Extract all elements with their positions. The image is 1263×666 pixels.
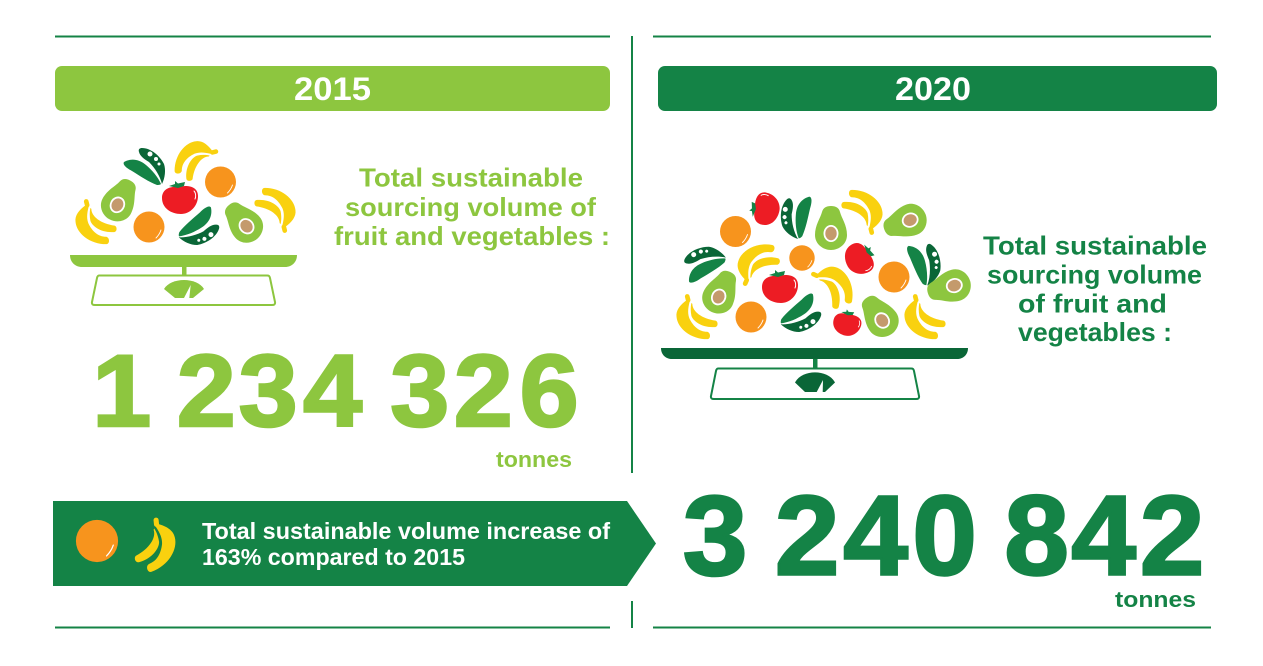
text: description 2015: [334, 162, 610, 251]
text: description 2020: Total sustainable: [983, 230, 1207, 260]
scale gauge: [164, 280, 204, 298]
orange: [878, 262, 910, 292]
orange: [789, 245, 815, 271]
icon: orange: [76, 520, 118, 562]
avocado: [815, 206, 847, 250]
unit: tonnes 2015: tonnes: [496, 447, 572, 472]
tomato: [162, 181, 198, 214]
pea pod top: [124, 148, 165, 185]
top rule left: [55, 36, 610, 38]
pea pod: [779, 287, 826, 338]
scale gauge: [795, 372, 835, 392]
text: description 2020: sourcing volume: [987, 260, 1202, 290]
banana: [676, 296, 718, 339]
banana top: [175, 141, 216, 181]
header bar 2015: [55, 66, 610, 111]
avocado right: [217, 195, 269, 249]
gauge needle: [184, 285, 191, 298]
callout text: 163% compared to 2015: [202, 544, 465, 570]
scale stem: [182, 267, 186, 275]
scale pan: [661, 348, 968, 359]
gauge needle: [817, 380, 823, 392]
header bar 2015: 2015: [294, 71, 371, 107]
icon: banana: [125, 516, 183, 576]
bottom rule left: [55, 626, 610, 628]
tomato: [762, 270, 798, 303]
text: description 2015: sourcing volume of: [345, 192, 596, 222]
callout text: [202, 518, 610, 570]
center divider upper: [631, 36, 633, 473]
icon: scale with produce 2020: [661, 186, 974, 399]
scale base: [711, 368, 919, 399]
orange upper: [205, 166, 236, 198]
banana right: [254, 188, 296, 231]
tomato: [839, 237, 881, 280]
callout text: Total sustainable volume increase of: [202, 518, 610, 544]
orange: [736, 302, 766, 332]
banana: [904, 296, 946, 339]
icon: scale with produce 2015: [70, 141, 297, 305]
callout arrow: [53, 501, 656, 586]
text: description 2015: fruit and vegetables :: [334, 221, 610, 251]
avocado: [879, 199, 931, 245]
avocado: [853, 289, 905, 343]
orange: [720, 216, 751, 247]
avocado left: [96, 173, 144, 227]
scale pan: [70, 255, 297, 267]
center divider lower: [631, 601, 633, 628]
pea pod: [770, 186, 826, 242]
text: description 2020: of fruit and: [1018, 288, 1167, 318]
text: description 2015: Total sustainable: [359, 162, 583, 192]
banana left: [75, 201, 117, 244]
scale base: [92, 276, 275, 305]
tomato: [830, 307, 864, 339]
avocado: [924, 266, 974, 308]
banana: [808, 264, 857, 311]
scale stem: [813, 359, 818, 368]
bottom rule right: [653, 626, 1211, 628]
unit: tonnes 2020: tonnes: [1115, 587, 1196, 612]
header bar 2020: 2020: [895, 71, 971, 107]
banana: [841, 190, 883, 233]
tomato: [747, 190, 782, 227]
text: description 2020: [983, 230, 1207, 347]
pea pod lower: [177, 200, 224, 251]
top rule right: [653, 36, 1211, 38]
orange lower: [134, 212, 164, 242]
text: description 2020: vegetables :: [1018, 317, 1172, 347]
avocado: [697, 265, 745, 319]
header bar 2020: [658, 66, 1217, 111]
pea pod: [676, 239, 728, 292]
pea pod: [895, 234, 950, 288]
figure: 3 240 842: 3 240 842: [683, 473, 1205, 599]
banana: [735, 240, 782, 289]
figure: 1 234 326: 1 234 326: [92, 335, 579, 449]
